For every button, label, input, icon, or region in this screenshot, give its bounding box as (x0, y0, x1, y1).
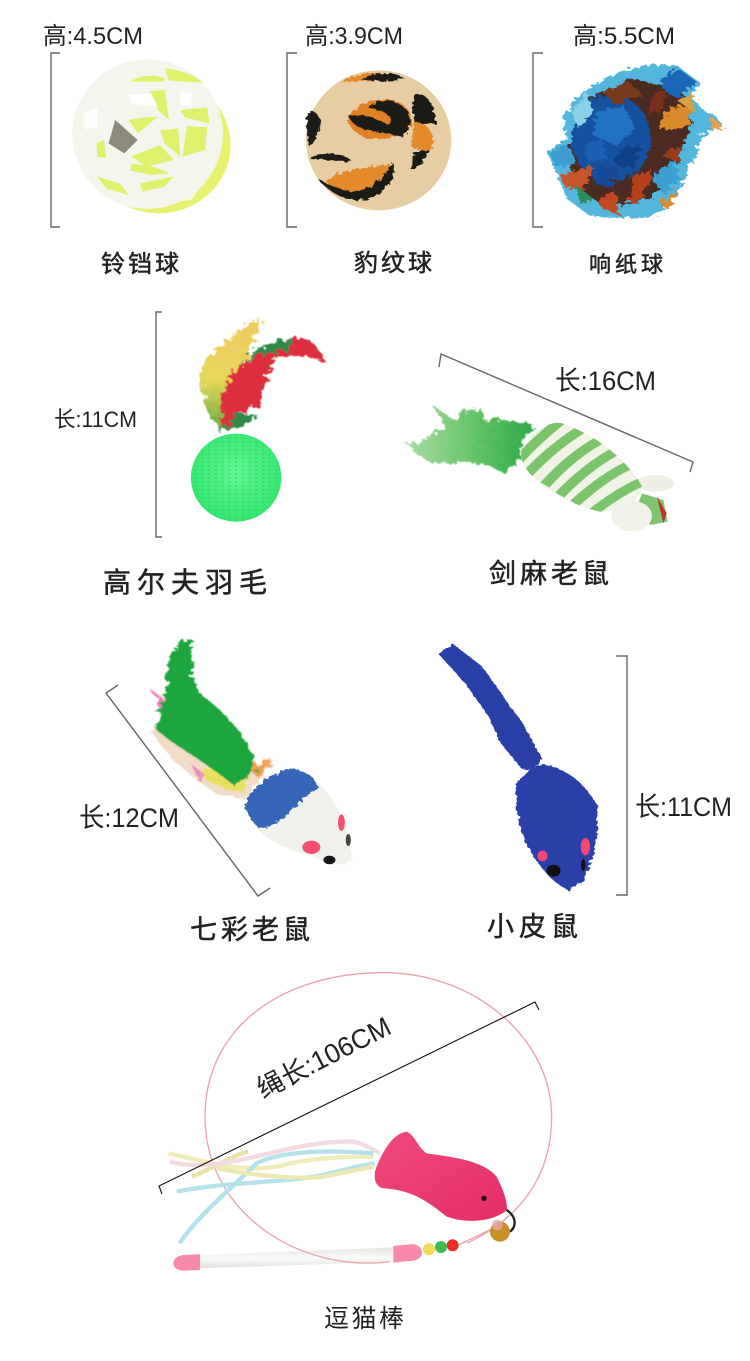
icon: bell ball (72, 59, 231, 213)
bell and hook (490, 1210, 515, 1242)
product: golf feather ball (54, 312, 327, 601)
icon: leopard ball (306, 70, 451, 210)
name: sisal mouse: 剑麻老鼠 (489, 552, 613, 591)
icon: teaser wand (168, 973, 552, 1271)
name: fur mouse: 小皮鼠 (487, 905, 583, 944)
icon: golf feather ball (191, 318, 327, 522)
length bracket: sisal mouse (439, 354, 693, 472)
name: bell ball: 铃铛球 (101, 244, 182, 279)
wand handle (173, 1239, 459, 1271)
product: crinkle foil ball (533, 23, 723, 279)
product: sisal mouse (407, 354, 693, 591)
icon: fur mouse (439, 643, 598, 890)
product: bell ball (43, 23, 231, 279)
name: leopard ball: 豹纹球 (354, 243, 435, 278)
icon: rainbow mouse (149, 638, 352, 865)
name: rainbow mouse: 七彩老鼠 (190, 908, 314, 947)
icon: sisal mouse (407, 407, 674, 531)
product: rainbow mouse (79, 638, 352, 947)
height label: leopard ball: 高:3.9CM (305, 23, 403, 50)
height bracket: foil ball (533, 53, 543, 227)
rope loop (205, 973, 552, 1263)
height bracket: bell ball (51, 53, 60, 227)
measure line: rope length (159, 1002, 539, 1194)
length label: golf feather: 长:11CM (54, 407, 137, 432)
length bracket: rainbow mouse (106, 685, 270, 896)
ribbons (168, 1142, 380, 1243)
fish eye (481, 1196, 487, 1201)
length bracket: golf feather (156, 312, 162, 537)
height bracket: leopard ball (287, 53, 297, 227)
fish toy (375, 1132, 507, 1221)
icon: foil ball (544, 63, 723, 217)
length label: rope: 绳长:106CM (252, 1011, 396, 1104)
length bracket: fur mouse (616, 656, 627, 895)
height label: foil ball: 高:5.5CM (573, 23, 675, 50)
product: leopard ball (287, 23, 451, 278)
length label: rainbow mouse: 长:12CM (79, 803, 179, 833)
name: teaser wand: 逗猫棒 (324, 1305, 404, 1333)
product: small fur mouse (439, 643, 732, 944)
length label: sisal mouse: 长:16CM (555, 366, 656, 396)
length label: fur mouse: 长:11CM (635, 792, 732, 822)
name: golf feather: 高尔夫羽毛 (103, 561, 273, 601)
name: foil ball: 响纸球 (589, 247, 667, 279)
product: teaser wand (159, 973, 552, 1333)
height label: bell ball: 高:4.5CM (43, 23, 143, 50)
